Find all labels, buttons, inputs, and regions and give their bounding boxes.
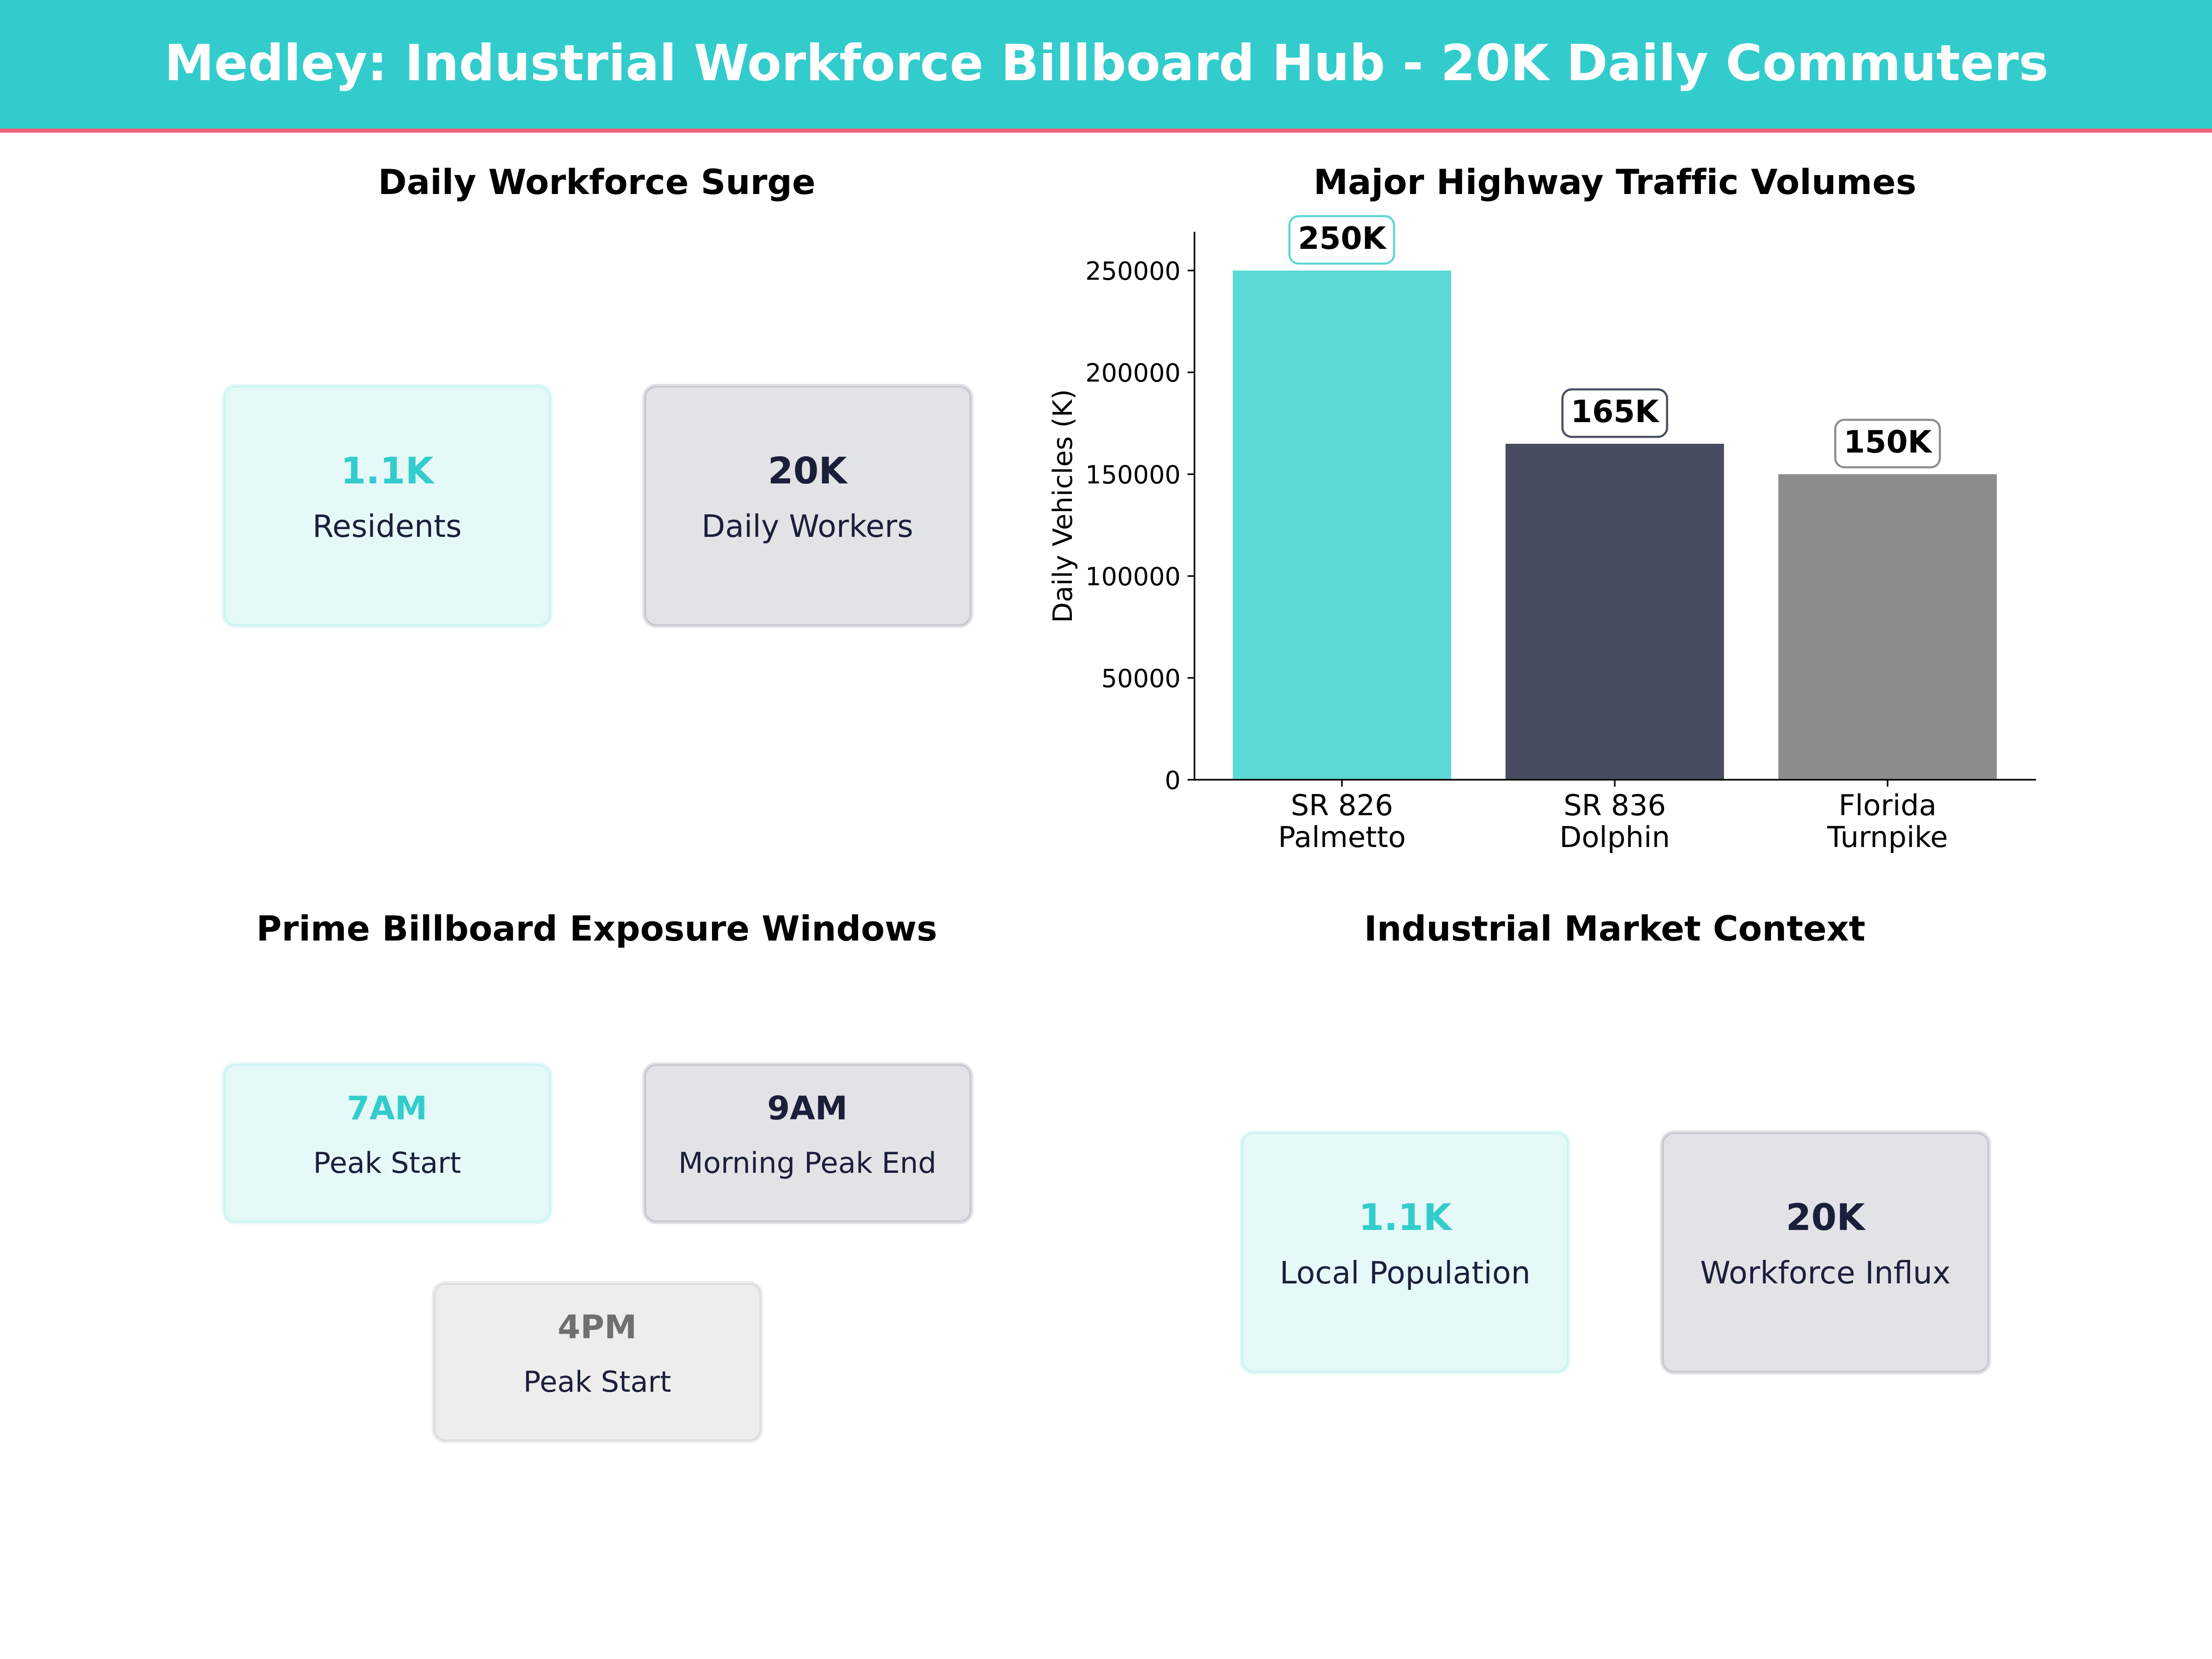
heading: industrial market context: Industrial Market Context bbox=[1364, 908, 1865, 949]
value label: 150K bbox=[1835, 420, 1940, 467]
value label: 250K bbox=[1289, 216, 1394, 264]
title: Medley: Industrial Workforce Billboard Hub - 20K Daily Commuters bbox=[165, 34, 2048, 92]
card: 9AM morning peak end: Morning Peak End bbox=[678, 1146, 936, 1180]
panel: industrial market context bbox=[1241, 908, 1989, 1372]
card: 7AM peak start: 7AM bbox=[347, 1089, 427, 1127]
y axis: 250000 bbox=[1085, 257, 1181, 286]
card: residents: 1.1K bbox=[341, 450, 435, 492]
panel: daily workforce surge bbox=[224, 162, 971, 626]
heading: daily workforce surge: Daily Workforce Surge bbox=[378, 162, 816, 202]
card: local population bbox=[1241, 1132, 1569, 1372]
x axis: Dolphin bbox=[1559, 820, 1670, 854]
card: 4PM peak start bbox=[434, 1283, 761, 1441]
heading: prime billboard exposure windows: Prime Billboard Exposure Windows bbox=[256, 908, 937, 949]
card: daily workers: Daily Workers bbox=[701, 508, 913, 544]
y axis: Daily Vehicles (K) bbox=[1047, 389, 1078, 623]
x axis: SR 836 bbox=[1564, 788, 1666, 822]
card: residents bbox=[224, 386, 551, 626]
card: workforce influx bbox=[1662, 1132, 1989, 1372]
bar: SR 836 Dolphin bbox=[1506, 444, 1724, 780]
heading: major highway traffic volumes: Major Highway Traffic Volumes bbox=[1313, 162, 1917, 202]
bar: Florida Turnpike bbox=[1778, 474, 1997, 780]
card: 4PM peak start: Peak Start bbox=[524, 1365, 671, 1399]
x axis bbox=[1194, 780, 2036, 854]
card: daily workers: 20K bbox=[768, 450, 848, 492]
card: residents: Residents bbox=[312, 508, 462, 544]
y axis: 150000 bbox=[1085, 460, 1181, 489]
card: workforce influx: 20K bbox=[1786, 1196, 1866, 1239]
card: 7AM peak start bbox=[224, 1064, 551, 1222]
y axis: 50000 bbox=[1101, 664, 1181, 693]
x axis: Turnpike bbox=[1827, 820, 1948, 854]
bar: SR 826 Palmetto bbox=[1233, 271, 1451, 780]
x axis: Florida bbox=[1839, 788, 1936, 822]
value label: 250K: 250K bbox=[1298, 220, 1387, 256]
y axis bbox=[1047, 232, 1194, 795]
card: workforce influx: Workforce Influx bbox=[1700, 1255, 1951, 1291]
card: local population: 1.1K bbox=[1359, 1196, 1453, 1239]
card: daily workers bbox=[644, 386, 971, 626]
header banner bbox=[0, 0, 2212, 133]
card: 4PM peak start: 4PM bbox=[558, 1308, 637, 1346]
card: local population: Local Population bbox=[1280, 1255, 1530, 1291]
panel: prime billboard exposure windows bbox=[224, 908, 971, 1441]
x axis: Palmetto bbox=[1278, 820, 1406, 854]
value label: 165K bbox=[1562, 389, 1667, 437]
value label: 150K: 150K bbox=[1844, 424, 1933, 460]
y axis: 0 bbox=[1165, 766, 1181, 795]
card: 7AM peak start: Peak Start bbox=[313, 1146, 461, 1180]
x axis: SR 826 bbox=[1291, 788, 1393, 822]
panel: major highway traffic volumes bbox=[1047, 162, 2036, 854]
bar chart bbox=[1047, 216, 2036, 854]
y axis: 100000 bbox=[1085, 562, 1181, 591]
y axis: 200000 bbox=[1085, 359, 1181, 388]
card: 9AM morning peak end bbox=[644, 1064, 971, 1222]
card: 9AM morning peak end: 9AM bbox=[767, 1089, 847, 1127]
value label: 165K: 165K bbox=[1571, 394, 1660, 429]
